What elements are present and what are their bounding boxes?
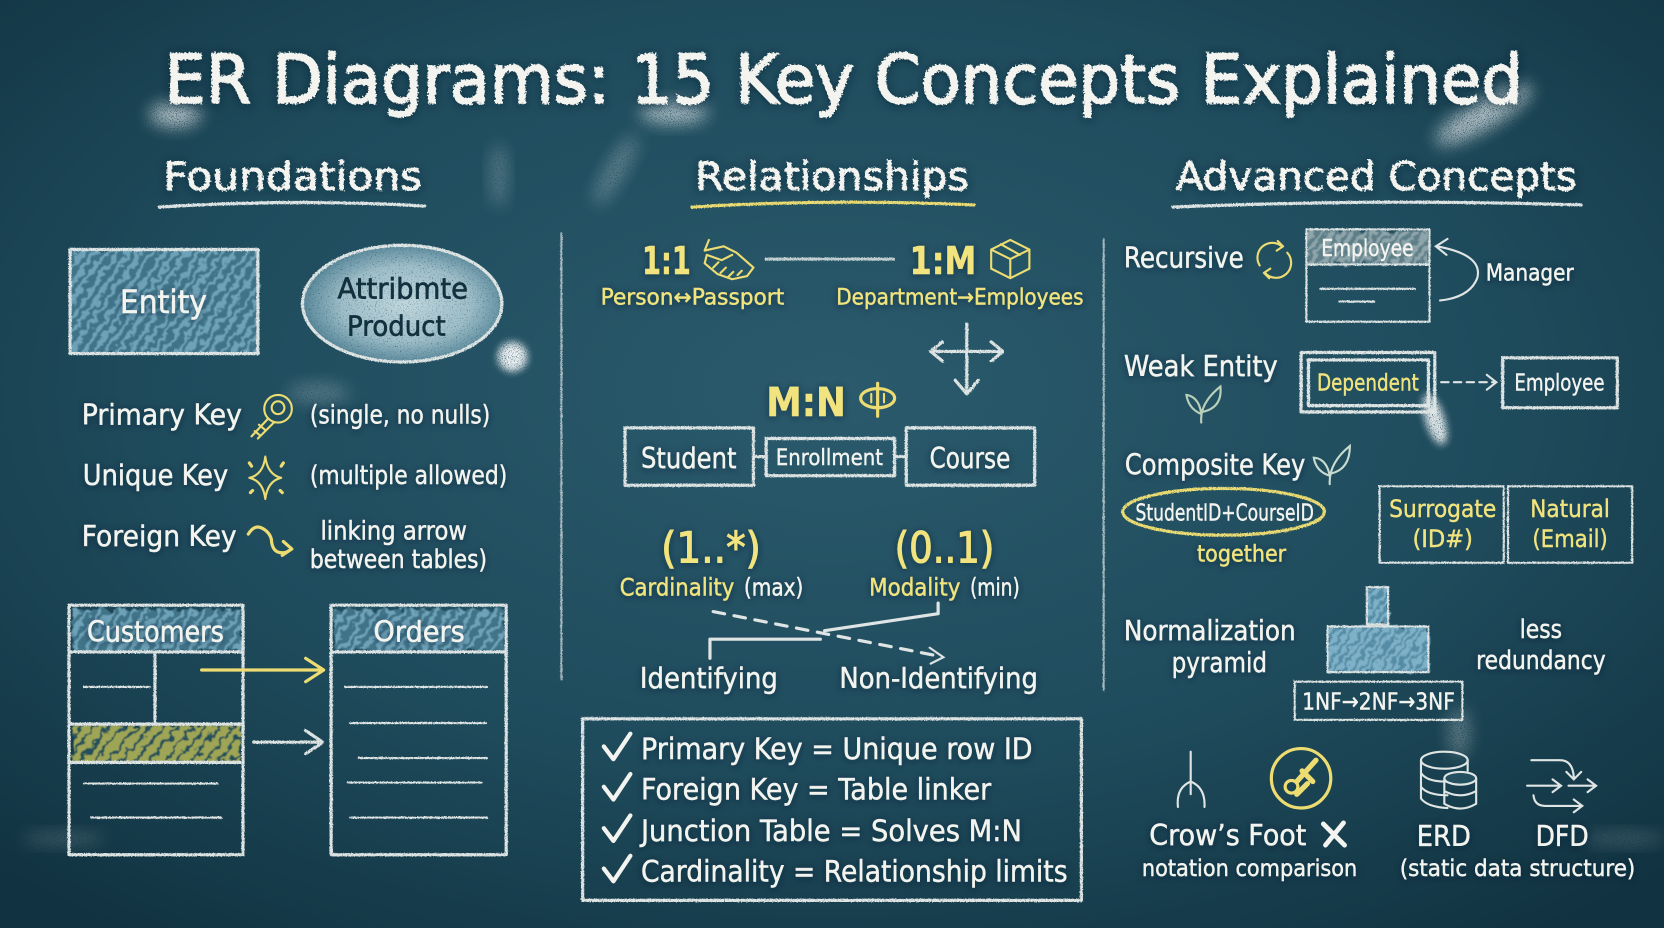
- icon: database: [1421, 752, 1476, 809]
- modality: [869, 525, 1020, 602]
- one-to-one: Person↔Passport: [601, 285, 784, 311]
- icon: leaf: [1186, 386, 1221, 423]
- dependent weak entity box: Dependent: [1317, 369, 1419, 397]
- weak entity: Weak Entity: [1124, 349, 1278, 383]
- icon: squiggle arrow: [248, 527, 292, 555]
- employee recursive table: [1306, 229, 1574, 322]
- crow's foot labels: notation comparison: [1142, 854, 1357, 882]
- icon: box: [991, 240, 1029, 278]
- identifying labels: [640, 661, 1038, 695]
- table: orders: Orders: [374, 614, 465, 648]
- attribute oval: Product: [347, 310, 446, 343]
- cardinality: Cardinality: [620, 573, 734, 602]
- table: orders: [331, 605, 506, 855]
- natural key box: Natural: [1530, 494, 1610, 523]
- less redundancy: less: [1520, 615, 1562, 645]
- check list: Foreign Key = Table linker: [641, 773, 992, 808]
- dependent weak entity box: [1301, 353, 1435, 412]
- arrow: self reference: [1436, 239, 1478, 300]
- modality: Modality: [869, 573, 960, 602]
- attribute oval: Attribmte: [337, 271, 468, 305]
- modality: (min): [970, 573, 1020, 602]
- check list: [604, 732, 1068, 889]
- cardinality: (1..*): [661, 525, 761, 574]
- recursive: Recursive: [1124, 241, 1244, 275]
- ERD vs DFD labels: (static data structure): [1400, 854, 1635, 882]
- table: customers: Customers: [87, 614, 224, 648]
- crow's foot labels: [1142, 818, 1357, 882]
- entity box: [70, 250, 258, 354]
- composite key: StudentID+CourseID: [1136, 498, 1314, 526]
- junction diagram: [625, 428, 1035, 485]
- icon: data flow: [1527, 760, 1596, 812]
- normalization label: pyramid: [1172, 646, 1267, 679]
- composite key: together: [1197, 540, 1287, 568]
- identifying labels: Identifying: [640, 661, 778, 695]
- icon: gold key circle: [1271, 749, 1331, 808]
- employee recursive table: Employee: [1321, 234, 1414, 262]
- employee box: Employee: [1514, 369, 1605, 397]
- ERD vs DFD labels: ERD: [1417, 819, 1471, 853]
- attribute oval: [302, 245, 502, 362]
- unique key row: (multiple allowed): [310, 461, 507, 491]
- check list: Junction Table = Solves M:N: [639, 814, 1022, 849]
- surrogate key box: (ID#): [1412, 524, 1473, 553]
- icon: sparkle: [249, 457, 283, 499]
- weak entity: [1124, 349, 1278, 423]
- one-to-one: 1:1: [642, 240, 691, 284]
- arrows: cross: [931, 324, 1003, 394]
- primary key row: (single, no nulls): [310, 401, 490, 431]
- surrogate key box: [1380, 486, 1504, 563]
- less redundancy: [1476, 615, 1606, 676]
- summary box: [583, 719, 1081, 900]
- natural key box: [1508, 486, 1632, 563]
- primary key row: Primary Key: [82, 398, 242, 432]
- one-to-many: Department→Employees: [836, 285, 1084, 311]
- check list: Cardinality = Relationship limits: [641, 854, 1068, 889]
- cardinality: [620, 525, 803, 602]
- many-to-many: M:N: [766, 379, 846, 426]
- identifying labels: Non-Identifying: [839, 661, 1038, 695]
- foreign key row: Foreign Key: [82, 519, 237, 553]
- normalization pyramid: [1295, 587, 1462, 720]
- check list: Primary Key = Unique row ID: [641, 732, 1033, 767]
- entity box: Entity: [120, 283, 207, 321]
- junction diagram: Student: [641, 441, 736, 475]
- crow's foot labels: Crow’s Foot: [1149, 818, 1306, 852]
- composite key: [1123, 446, 1350, 568]
- employee recursive table: Manager: [1486, 258, 1574, 286]
- one-to-one: [601, 240, 784, 311]
- icon: cycle: [1257, 241, 1291, 278]
- composite key: Composite Key: [1125, 448, 1305, 482]
- connector line: [766, 258, 894, 261]
- icon: junction symbol: [861, 383, 895, 416]
- one-to-many: 1:M: [909, 240, 976, 284]
- surrogate key box: Surrogate: [1389, 494, 1496, 523]
- icon: key: [252, 395, 292, 439]
- arrow: dependent to employee: [1441, 375, 1496, 390]
- cardinality: (max): [744, 573, 803, 602]
- icon: leaf: [1314, 446, 1350, 484]
- one-to-many: [836, 240, 1084, 311]
- heading: relationships: Relationships: [695, 155, 969, 200]
- ERD vs DFD labels: [1400, 819, 1635, 882]
- table: customers: [69, 605, 243, 855]
- heading: advanced concepts: Advanced Concepts: [1176, 155, 1577, 200]
- normalization label: [1124, 614, 1296, 679]
- junction diagram: Course: [930, 441, 1010, 475]
- normalization pyramid: 1NF→2NF→3NF: [1302, 687, 1455, 715]
- employee box: [1503, 358, 1617, 408]
- unique key row: Unique Key: [83, 458, 228, 492]
- panel: foundations: [69, 155, 507, 855]
- primary key row: [82, 395, 490, 439]
- panel: advanced concepts: [1123, 155, 1635, 882]
- foreign key row: linking arrow: [320, 516, 467, 546]
- modality: (0..1): [895, 525, 994, 574]
- title: ER Diagrams: 15 Key Concepts Explained: [164, 41, 1523, 120]
- icon: handshake: [705, 240, 753, 279]
- arrow: yellow link: [202, 658, 324, 682]
- relationship lines: [710, 603, 943, 664]
- normalization label: Normalization: [1124, 614, 1296, 647]
- heading: foundations: Foundations: [163, 155, 422, 200]
- foreign key row: [82, 516, 487, 575]
- unique key row: [83, 457, 507, 499]
- foreign key row: between tables): [310, 545, 487, 575]
- icon: crow's foot: [1178, 752, 1205, 807]
- ellipse: composite key fields: [1123, 488, 1324, 535]
- natural key box: (Email): [1532, 524, 1608, 553]
- ERD vs DFD labels: DFD: [1536, 819, 1589, 853]
- less redundancy: redundancy: [1476, 646, 1606, 676]
- panel: relationships: [583, 155, 1084, 900]
- arrow: white link: [254, 731, 323, 754]
- junction diagram: Enrollment: [776, 445, 883, 471]
